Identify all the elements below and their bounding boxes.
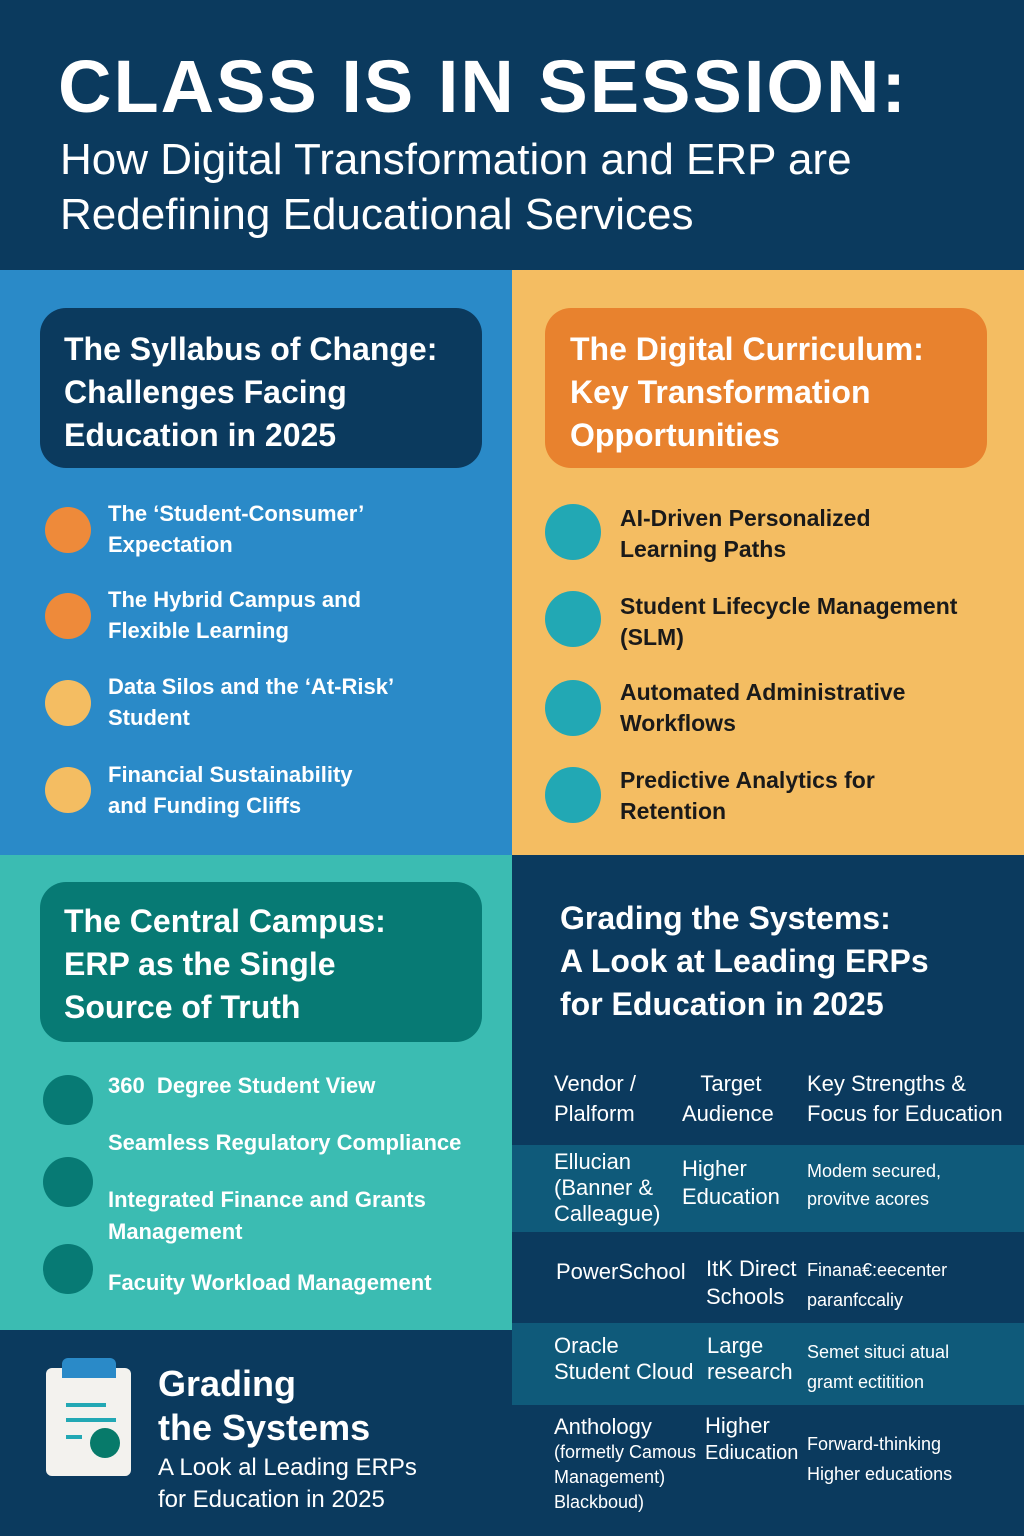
list: central campus: 360 Degree Student View — [108, 1073, 375, 1098]
heading: opportunities: The Digital Curriculum: — [570, 331, 924, 367]
heading: central campus: ERP as the Single — [64, 946, 336, 982]
heading: challenges: The Syllabus of Change: — [64, 331, 437, 367]
panel: opportunities — [512, 270, 1024, 855]
table: Finana€:eecenter — [807, 1260, 947, 1280]
table: Anthology — [554, 1414, 652, 1439]
subtitle — [60, 135, 852, 239]
table: Forward-thinking — [807, 1434, 941, 1454]
list: opportunities: Workflows — [620, 710, 736, 736]
panel: grading bottom left: for Education in 2025 — [158, 1486, 385, 1513]
table: (formetly Camous — [554, 1442, 696, 1462]
text: grading: Grading — [158, 1363, 296, 1404]
list: opportunities: (SLM) — [620, 624, 684, 650]
heading: central campus — [40, 882, 482, 1042]
table: Student Cloud — [554, 1359, 693, 1384]
subtitle: How Digital Transformation and ERP are — [60, 135, 852, 184]
heading: grading systems: for Education in 2025 — [560, 986, 884, 1022]
table: paranfccaliy — [807, 1290, 903, 1310]
list: opportunities: Learning Paths — [620, 536, 786, 562]
table: Target — [700, 1071, 762, 1096]
table: Schools — [706, 1284, 784, 1309]
table: Education — [682, 1184, 780, 1209]
list: challenges: Flexible Learning — [108, 618, 289, 643]
list: challenges: Expectation — [108, 532, 233, 557]
panel: grading bottom left — [0, 1330, 512, 1536]
list: challenges: and Funding Cliffs — [108, 793, 301, 818]
heading: central campus: The Central Campus: — [64, 903, 386, 939]
list: opportunities: Retention — [620, 798, 726, 824]
list: central campus: Integrated Finance and Grants — [108, 1187, 426, 1212]
list: challenges: Financial Sustainability — [108, 762, 353, 787]
list: opportunities: AI-Driven Personalized — [620, 505, 871, 531]
text: grading — [158, 1363, 370, 1448]
heading: central campus: Source of Truth — [64, 989, 300, 1025]
table: provitve acores — [807, 1189, 929, 1209]
heading: grading systems — [560, 900, 929, 1022]
table: Large — [707, 1333, 763, 1358]
table: Key Strengths & — [807, 1071, 966, 1096]
list: opportunities — [545, 504, 958, 824]
table: Focus for Education — [807, 1101, 1003, 1126]
table: ItK Direct — [706, 1256, 796, 1281]
table: Higher — [705, 1413, 770, 1438]
heading: grading systems: Grading the Systems: — [560, 900, 891, 936]
list: opportunities: Automated Administrative — [620, 679, 905, 705]
panel: challenges — [0, 270, 512, 855]
table: research — [707, 1359, 793, 1384]
list: challenges: Data Silos and the ‘At-Risk’ — [108, 674, 394, 699]
subtitle: Redefining Educational Services — [60, 190, 694, 239]
table: Plalform — [554, 1101, 635, 1126]
panel: grading bottom left: A Look al Leading ERPs — [158, 1454, 417, 1481]
list: challenges: The Hybrid Campus and — [108, 587, 361, 612]
heading: opportunities: Key Transformation — [570, 374, 871, 410]
table: Audience — [682, 1101, 774, 1126]
table: Calleague) — [554, 1201, 660, 1226]
heading: opportunities: Opportunities — [570, 417, 780, 453]
list: central campus: Seamless Regulatory Compliance — [108, 1130, 461, 1155]
table: (Banner & — [554, 1175, 653, 1200]
heading: challenges — [40, 308, 482, 468]
list: challenges: The ‘Student-Consumer’ — [108, 501, 364, 526]
panel: central campus — [0, 855, 512, 1330]
list: opportunities: Predictive Analytics for — [620, 767, 875, 793]
list: challenges — [45, 501, 394, 818]
table: Management) — [554, 1467, 665, 1487]
table: gramt ectitition — [807, 1372, 924, 1392]
heading: opportunities — [545, 308, 987, 468]
table — [512, 1071, 1024, 1512]
table: Ediucation — [705, 1442, 798, 1464]
text: grading: the Systems — [158, 1407, 370, 1448]
table: Ellucian — [554, 1149, 631, 1174]
heading: challenges: Challenges Facing — [64, 374, 347, 410]
table: Higher educations — [807, 1464, 952, 1484]
heading: challenges: Education in 2025 — [64, 417, 336, 453]
panel: ERP table — [512, 855, 1024, 1536]
list: challenges: Student — [108, 705, 190, 730]
table: Semet situci atual — [807, 1342, 949, 1362]
title: CLASS IS IN SESSION: — [58, 45, 908, 128]
table: PowerSchool — [556, 1259, 686, 1284]
heading: grading systems: A Look at Leading ERPs — [560, 943, 929, 979]
table: Modem secured, — [807, 1161, 941, 1181]
list: central campus — [43, 1073, 461, 1295]
header — [0, 0, 1024, 270]
list: central campus: Management — [108, 1219, 242, 1244]
table: Higher — [682, 1156, 747, 1181]
icon: clipboard — [46, 1358, 131, 1476]
list: central campus: Facuity Workload Management — [108, 1270, 432, 1295]
list: opportunities: Student Lifecycle Management — [620, 593, 957, 619]
table: Oracle — [554, 1333, 619, 1358]
table: Vendor / — [554, 1071, 636, 1096]
table: Blackboud) — [554, 1492, 644, 1512]
